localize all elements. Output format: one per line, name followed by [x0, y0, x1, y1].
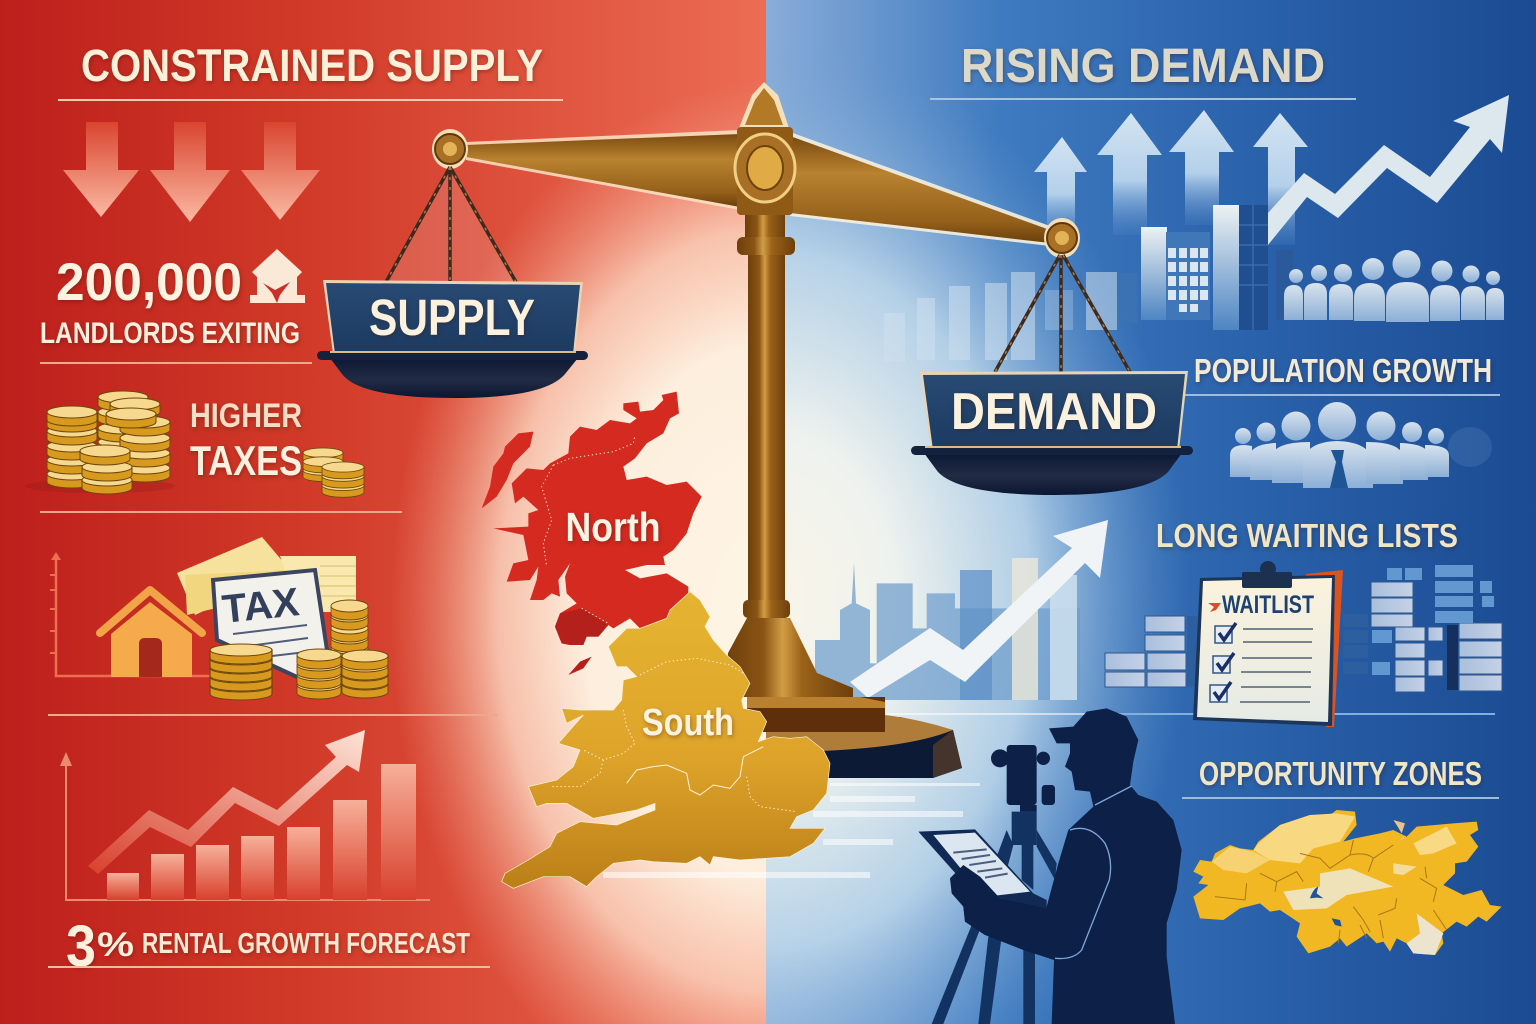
stat: opportunity zones [1182, 755, 1502, 955]
chart: city skyline with up arrows [884, 95, 1509, 362]
person [950, 708, 1182, 1024]
tripod and camera [932, 745, 1057, 1024]
arrow: rising line [1268, 95, 1509, 245]
map region: south [502, 592, 830, 888]
background: supply side [0, 0, 766, 1024]
icon: crowd [1284, 250, 1504, 322]
stat: population growth [1182, 352, 1500, 488]
scale base [725, 618, 962, 778]
heading: constrained supply: CONSTRAINED SUPPLY [81, 40, 543, 91]
icon: house [250, 249, 305, 303]
map region: north [482, 392, 702, 675]
map region: north: North [566, 504, 660, 550]
stat: higher taxes: HIGHER [190, 397, 302, 435]
stat: 3% rental growth forecast: RENTAL GROWTH FORECAST [142, 928, 470, 960]
icon: waitlist clipboard: WAITLIST [1222, 591, 1314, 619]
background: central glow left [402, 106, 766, 1024]
supply pan [317, 167, 588, 398]
icon: coin stacks [47, 391, 364, 497]
map: UK [482, 392, 830, 888]
chart: rental growth bars [60, 730, 430, 900]
panel: constrained supply [25, 40, 563, 979]
stat: 3% rental growth forecast: 3 [66, 914, 96, 979]
chart: rising arrow and city [815, 520, 1108, 700]
demand pan [911, 255, 1193, 495]
background: demand side [766, 0, 1536, 1024]
icon: coins [210, 600, 388, 700]
icon: waitlist clipboard [1193, 561, 1343, 727]
document: tax [213, 570, 327, 677]
map: opportunity zones [1193, 810, 1502, 955]
floor streaks [603, 713, 1120, 878]
stat: higher taxes: TAXES [190, 437, 302, 484]
supply pan: SUPPLY [369, 289, 535, 346]
scale post [737, 212, 795, 618]
background: central glow right [766, 122, 1170, 1024]
document: tax: TAX [220, 580, 302, 632]
stat: 200,000 landlords exiting: 200,000 [56, 253, 242, 312]
icon: three down arrows [63, 122, 320, 222]
illustration: tax house and coins [48, 537, 498, 716]
stat: long waiting lists: LONG WAITING LISTS [1156, 517, 1458, 554]
heading: rising demand: RISING DEMAND [961, 40, 1325, 93]
stat: 200,000 landlords exiting [40, 249, 312, 364]
stat: higher taxes [25, 391, 402, 513]
balance scale [317, 82, 1193, 878]
map region: south: South [642, 702, 734, 744]
icon: house [100, 590, 202, 677]
panel: rising demand [815, 40, 1509, 955]
stat: 3% rental growth forecast [48, 914, 490, 979]
silhouette: surveyor with tripod [918, 708, 1182, 1024]
stat: 200,000 landlords exiting: LANDLORDS EXITING [40, 317, 300, 350]
stat: 3% rental growth forecast: % [97, 926, 134, 964]
demand pan: DEMAND [951, 383, 1157, 441]
scale beam [432, 82, 1080, 258]
arrow: rising trend [88, 730, 365, 874]
tablet [918, 829, 1047, 935]
icon: people [1230, 402, 1449, 488]
icon: server stacks [1105, 565, 1502, 715]
